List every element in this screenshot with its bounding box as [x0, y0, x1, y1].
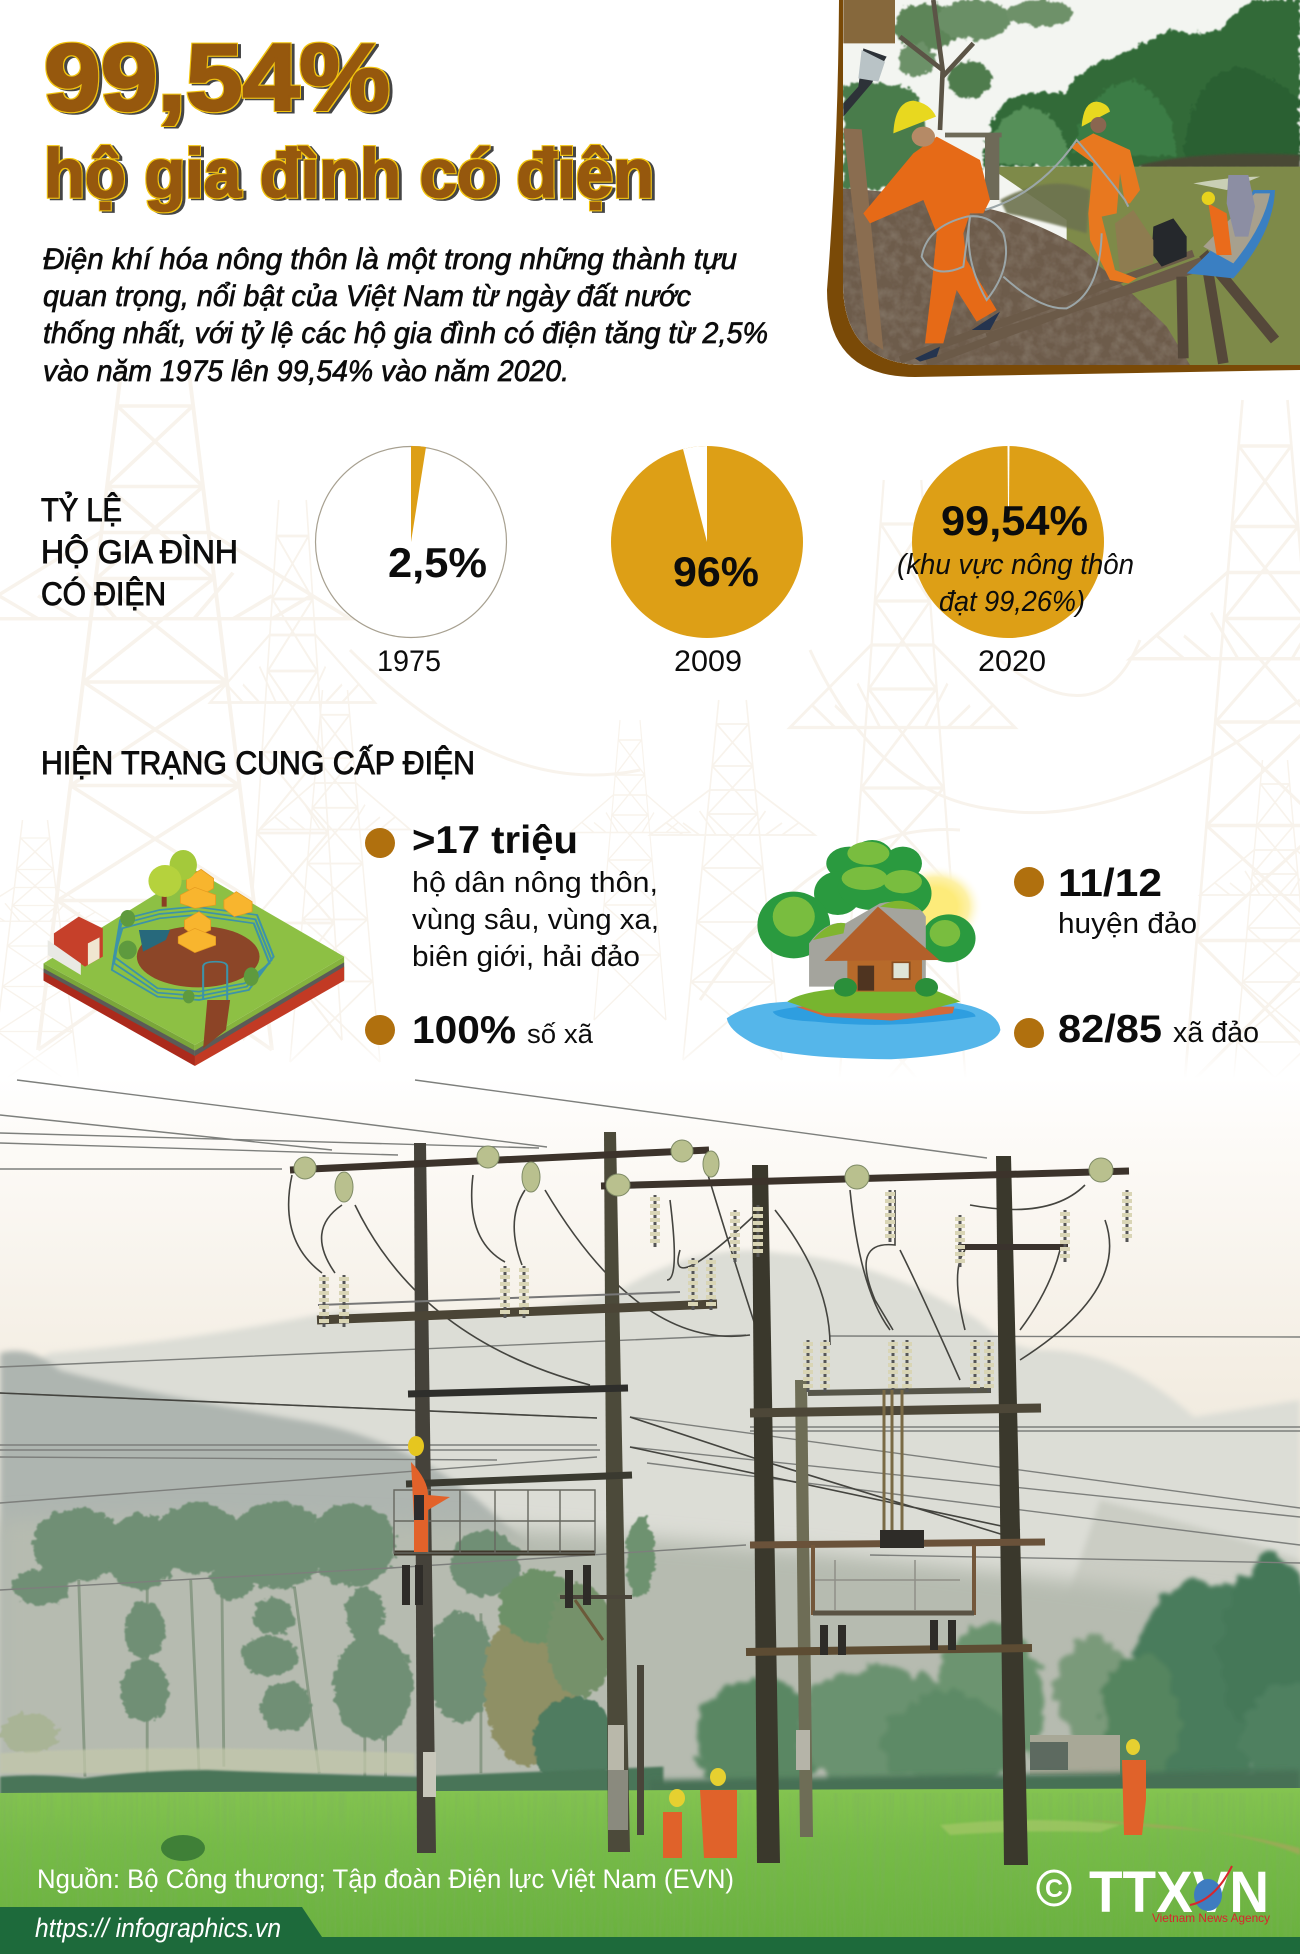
title: hộ gia đình có điện [44, 135, 654, 212]
intro paragraph [43, 243, 768, 388]
icon: isometric farm [44, 850, 344, 1066]
far trees [843, 0, 1300, 190]
stat: 100% communes: 100% [412, 1009, 516, 1052]
worker on pole [408, 1436, 450, 1552]
transformer rods and cutouts [884, 1390, 902, 1530]
logo: TTXVN: C [1045, 1875, 1063, 1903]
stat: 82/85 island communes: 82/85 [1058, 1008, 1162, 1051]
pole 1 [414, 1143, 436, 1853]
pie chart 1975: 2,5% [388, 539, 487, 586]
boat [1187, 190, 1275, 278]
worker on boat [1208, 203, 1232, 255]
field workers [663, 1739, 1146, 1858]
sky [0, 1040, 1300, 1810]
top right photo: workers crossing a bamboo bridge [827, 0, 1300, 400]
section label: household rate: CÓ ĐIỆN [41, 576, 166, 612]
title [44, 25, 654, 212]
overhead wires [0, 1080, 1300, 1590]
pie chart 1975: 1975 [377, 645, 441, 678]
footer bar with url tab [0, 1907, 1300, 1954]
pie chart 2020 [897, 446, 1134, 678]
insulator stacks [319, 1190, 1132, 1392]
left post [843, 128, 883, 350]
hay bales [178, 869, 252, 953]
pie chart 2009 [611, 446, 803, 678]
pie chart 2020: (khu vực nông thôn [897, 549, 1134, 581]
trees [162, 893, 167, 907]
worker 2 [1070, 133, 1140, 283]
title: 99,54% [44, 25, 390, 131]
crossarms [290, 1150, 1129, 1652]
footer bar with url tab: https:// infographics.vn [35, 1913, 281, 1943]
back pole [795, 1380, 813, 1837]
worker 1 [863, 137, 997, 343]
stat: 100% communes: số xã [527, 1019, 594, 1049]
background pattern: electricity towers [0, 360, 1300, 1140]
section label: household rate: HỘ GIA ĐÌNH [41, 534, 238, 570]
section heading: supply status: HIỆN TRẠNG CUNG CẤP ĐIỆN [41, 745, 475, 781]
water [988, 167, 1300, 365]
stat: >17 million: >17 triệu [412, 819, 578, 862]
section label: household rate: TỶ LỆ [41, 492, 122, 528]
logo: TTXVN: Vietnam News Agency [1152, 1911, 1270, 1925]
pole 2 [604, 1132, 630, 1852]
right trees [695, 1555, 1300, 1800]
pole 4 [996, 1156, 1028, 1865]
hills [0, 1250, 1300, 1800]
cabin and structure [945, 133, 1002, 200]
stat: 82/85 island communes: xã đảo [1173, 1017, 1259, 1049]
left trees [0, 1502, 663, 1795]
pie chart 2020: 99,54% [941, 497, 1088, 544]
intro paragraph: Điện khí hóa nông thôn là một trong những thành tựu [43, 243, 737, 276]
intro paragraph: quan trọng, nổi bật của Việt Nam từ ngày đất nước [43, 280, 691, 313]
fence [112, 907, 274, 1000]
cable coils [922, 140, 1128, 308]
insulators on top arms [294, 1140, 1113, 1202]
pie chart 2009: 2009 [674, 645, 742, 678]
logo: TTXVN: TTXVN [1089, 1860, 1269, 1925]
intro paragraph: vào năm 1975 lên 99,54% vào năm 2020. [43, 355, 569, 388]
boat passenger [1227, 175, 1255, 237]
pie chart 2020: đạt 99,26%) [939, 586, 1085, 618]
stat: 11/12 island districts: 11/12 [1058, 862, 1162, 905]
pie chart 2020: 2020 [978, 645, 1046, 678]
bamboo bridge [900, 253, 1203, 363]
bags [1152, 218, 1187, 267]
section label: household rate [41, 492, 238, 612]
rice field [0, 1788, 1300, 1954]
icon: island with hut [727, 840, 1000, 1059]
stat: 100% communes [365, 1009, 594, 1052]
stat: 82/85 island communes [1014, 1008, 1259, 1051]
stat: >17 million: hộ dân nông thôn, [412, 867, 658, 899]
stat: 11/12 island districts [1014, 862, 1197, 940]
photo frame [827, 0, 1300, 377]
pole 3 [752, 1165, 780, 1863]
ground [840, 188, 1190, 365]
pie chart 2009: 96% [673, 548, 759, 595]
stat: >17 million [365, 819, 659, 973]
haze tree band [0, 1517, 1300, 1800]
intro paragraph: thống nhất, với tỷ lệ các hộ gia đình có điện tăng từ 2,5% [43, 317, 768, 350]
source note: Nguồn: Bộ Công thương; Tập đoàn Điện lực Việt Nam (EVN) [37, 1864, 734, 1894]
stat: 11/12 island districts: huyện đảo [1058, 908, 1197, 940]
barn [54, 917, 103, 967]
stat: >17 million: vùng sâu, vùng xa, [412, 904, 659, 936]
pie chart 1975 [316, 446, 506, 678]
stat: >17 million: biên giới, hải đảo [412, 941, 640, 973]
bottom photo: power poles over rice field [0, 1040, 1300, 1954]
platform meshes [394, 1490, 595, 1553]
